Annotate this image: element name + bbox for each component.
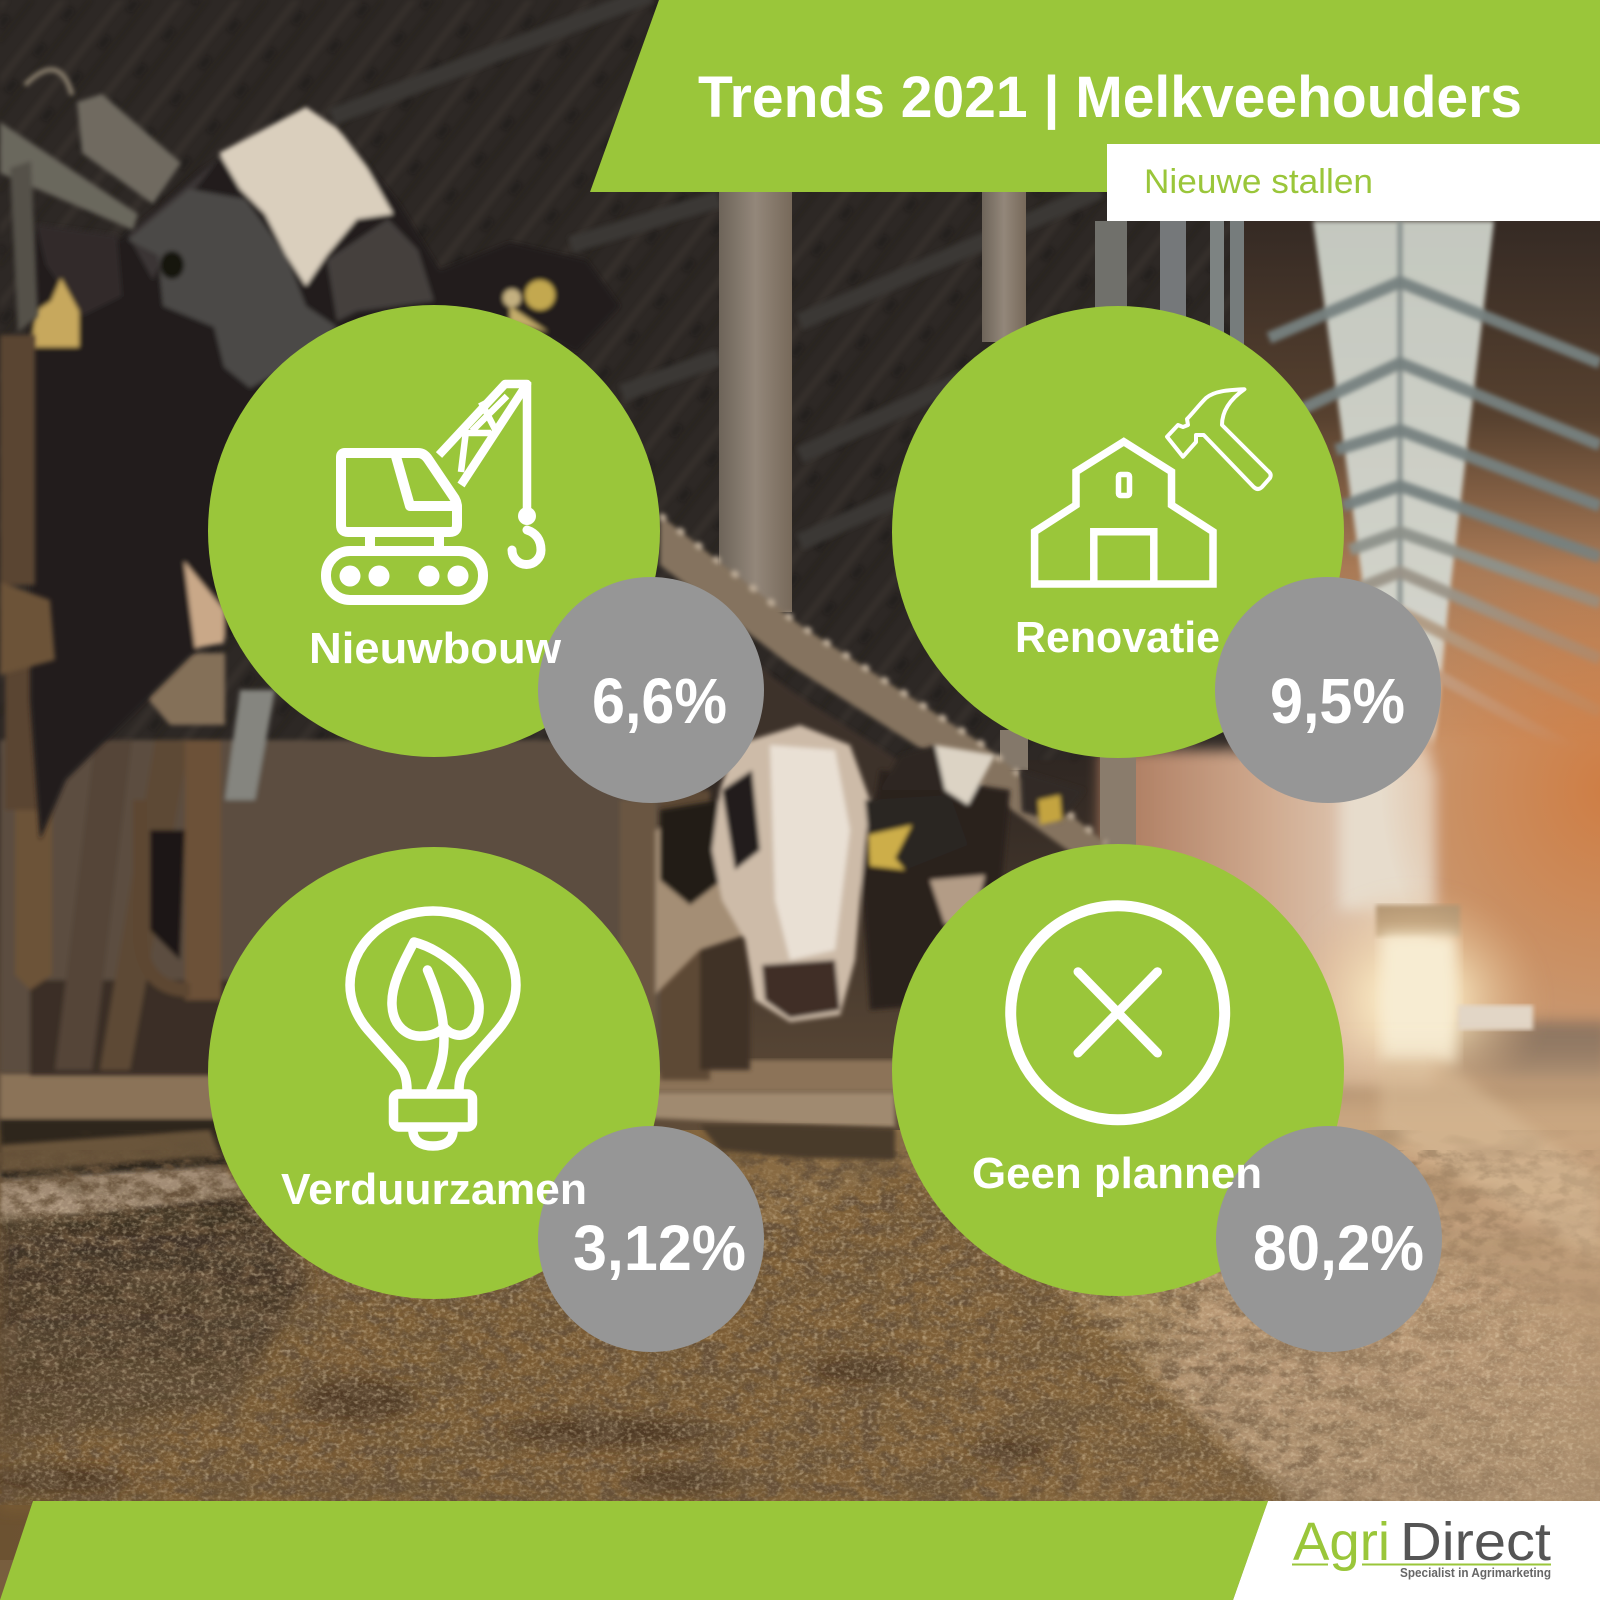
middle cows: [655, 725, 1085, 1022]
percentage: 6,6%: 6,6%: [592, 665, 727, 737]
icon: light bulb with leaf: [350, 911, 516, 1146]
stanchions lower left: [0, 653, 750, 1080]
percentage: 6,6%: [538, 577, 764, 803]
subtitle box: Nieuwe stallen: [1144, 163, 1373, 201]
panel: Verduurzamen: [208, 847, 660, 1299]
ground and silage: [0, 1060, 1600, 1560]
logo: AgriDirect: Specialist in Agrimarketing: [1400, 1565, 1551, 1580]
big cow head and neck: [30, 107, 620, 840]
panel: Nieuwbouw: [208, 305, 660, 757]
skylight and right roof: [1240, 221, 1600, 800]
percentage: 9,5%: 9,5%: [1270, 665, 1405, 737]
label: Verduurzamen: Verduurzamen: [281, 1165, 587, 1214]
left stanchion metal: [0, 70, 181, 675]
top title panel: [590, 0, 1600, 192]
label: Geen plannen: Geen plannen: [972, 1149, 1262, 1198]
logo: AgriDirect: Agri: [1293, 1512, 1390, 1572]
percentage: 3,12%: [538, 1126, 764, 1352]
fence diagonal: [660, 515, 1106, 870]
icon: circled cross: [1011, 906, 1225, 1120]
percentage: 80,2%: 80,2%: [1253, 1212, 1424, 1284]
logo: AgriDirect: Direct: [1400, 1512, 1551, 1572]
barn roof left: [0, 0, 1290, 760]
panel: Renovatie: [892, 306, 1344, 758]
icon: crane: [326, 382, 541, 600]
logo: AgriDirect: [1292, 1512, 1551, 1580]
label: Renovatie: Renovatie: [1015, 613, 1220, 662]
percentage: 9,5%: [1215, 577, 1441, 803]
icon: hammer: [1167, 389, 1271, 489]
label: Nieuwbouw: Nieuwbouw: [309, 624, 562, 673]
footer bar: [0, 1501, 1600, 1600]
panel: Geen plannen: [892, 844, 1344, 1296]
sunlit wall and far barn end: [1000, 540, 1600, 1115]
title: Trends 2021 | Melkveehouders: [698, 65, 1522, 130]
subtitle box: [1107, 144, 1600, 221]
percentage: 3,12%: 3,12%: [573, 1212, 746, 1284]
icon: barn: [1035, 442, 1213, 584]
feed rail: [0, 1060, 910, 1160]
percentage: 80,2%: [1216, 1126, 1442, 1352]
pillars: [719, 192, 1244, 612]
